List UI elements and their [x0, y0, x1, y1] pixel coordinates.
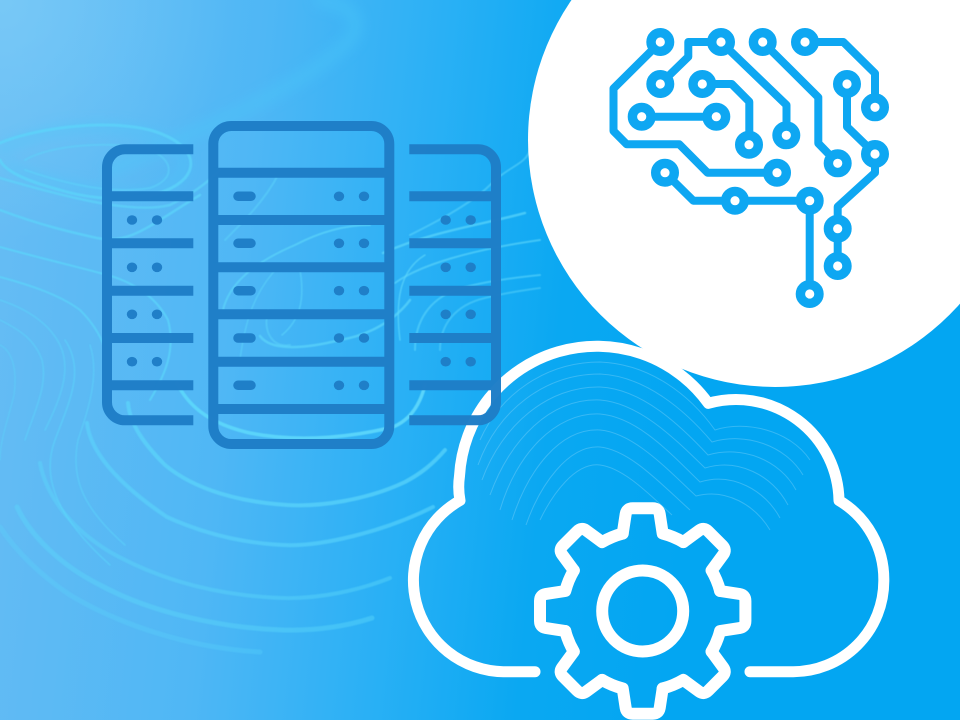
icon: server racks — [107, 126, 496, 444]
center server rack — [213, 126, 389, 444]
left server rack — [107, 149, 193, 420]
white circle panel — [528, 0, 960, 387]
icon: cloud outline — [413, 346, 884, 672]
right server rack — [409, 149, 496, 420]
icon: circuit brain — [614, 33, 884, 303]
icon: gear — [540, 508, 745, 714]
